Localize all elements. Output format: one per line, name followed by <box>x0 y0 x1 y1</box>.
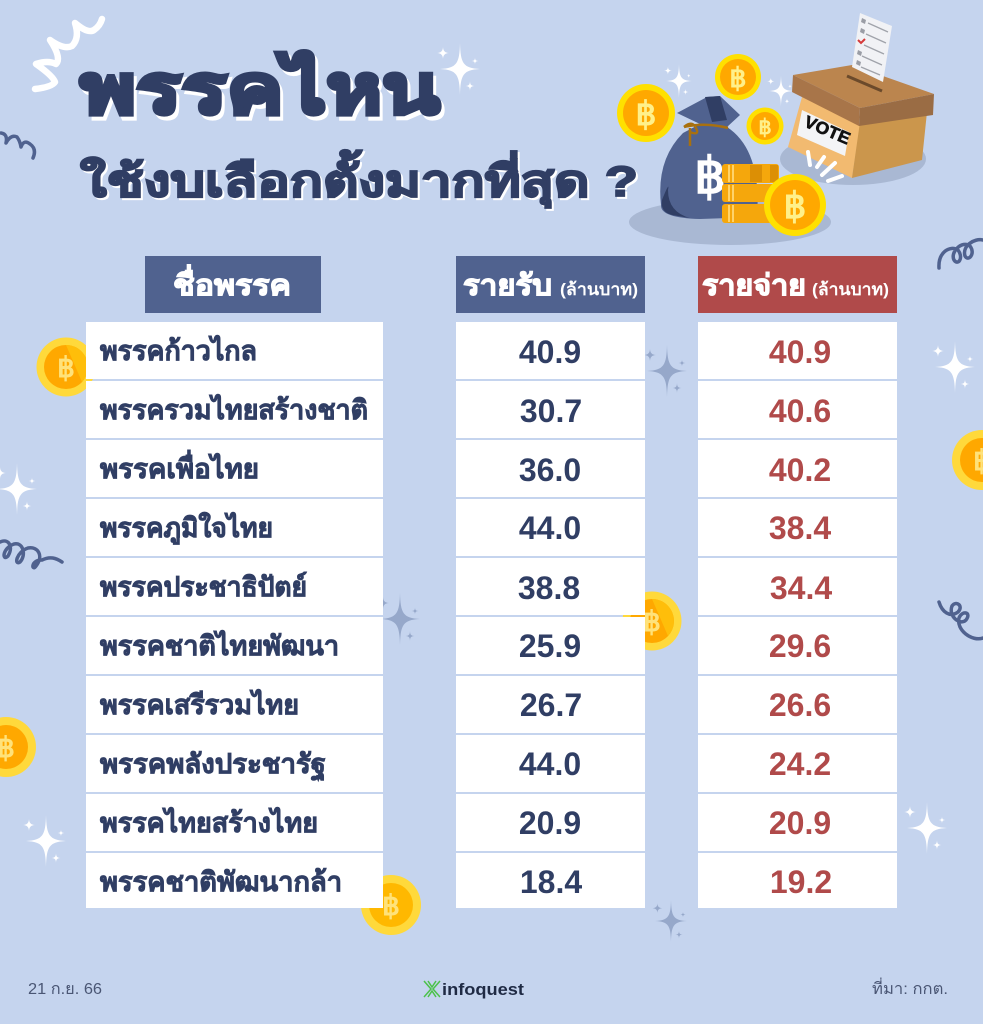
table: party names: พรรครวมไทยสร้างชาติ <box>100 394 368 425</box>
coin stack <box>722 164 779 223</box>
money bag <box>629 96 831 245</box>
footer: infoquest logo: infoquest <box>442 980 524 999</box>
table: income values: 40.9 <box>519 334 581 370</box>
squiggle: right lower <box>939 602 983 639</box>
title line 2: ใช้งบเลือกตั้งมากที่สุด ? <box>82 151 640 211</box>
coin: small: ฿ <box>758 116 772 139</box>
table: income values: 36.0 <box>519 452 581 488</box>
table: party names: พรรคก้าวไกล <box>100 335 257 366</box>
table: expense values: 40.6 <box>769 393 831 429</box>
sparkle: bottom <box>653 900 687 942</box>
squiggle: top left <box>35 19 102 89</box>
table: party names: พรรคพลังประชารัฐ <box>100 749 326 782</box>
coin: table bottom: ฿ <box>382 890 400 921</box>
coin: left: ฿ <box>636 95 656 132</box>
title line 1: พรรคไหน <box>83 54 443 132</box>
table: income values: 30.7 <box>520 393 582 429</box>
table: party names: พรรคไทยสร้างไทย <box>100 807 318 838</box>
table: expense values <box>698 322 897 908</box>
header: expense <box>698 256 897 313</box>
coin: right edge <box>952 430 983 490</box>
table: expense values: 34.4 <box>770 570 832 606</box>
coin: centre <box>622 592 682 650</box>
sparkle: between table and income <box>377 593 420 645</box>
table: expense values: 29.6 <box>769 628 831 664</box>
table: party names: พรรคประชาธิปัตย์ <box>100 571 307 602</box>
table: party names <box>86 322 383 908</box>
squiggle: right upper <box>939 240 983 268</box>
sparkle: right upper <box>932 341 975 393</box>
ballot box <box>780 13 934 185</box>
ballot box: VOTE <box>801 112 853 148</box>
sparkle: by coins <box>664 64 692 98</box>
table: income values: 38.8 <box>518 570 580 606</box>
title line 2 <box>80 149 640 211</box>
table: income values: 44.0 <box>519 510 581 546</box>
table: party names: พรรคเสรีรวมไทย <box>100 689 299 720</box>
header: expense: (ล้านบาท) <box>812 280 889 299</box>
header: party name: ชื่อพรรค <box>173 264 291 302</box>
sparkle: right lower <box>904 802 947 854</box>
coin: left of table: ฿ <box>57 352 75 383</box>
sparkle: left lower <box>23 815 66 867</box>
table: income values <box>456 322 645 908</box>
table: income values: 20.9 <box>519 805 581 841</box>
title line 1: พรรคไหน <box>80 50 440 128</box>
illustration: money bag, coins and ballot box <box>617 13 934 245</box>
coin: small <box>746 108 784 144</box>
footer: source: ที่มา: กกต. <box>872 977 948 998</box>
sparkle: by box <box>767 75 793 107</box>
header: party name <box>145 256 321 313</box>
table: expense values: 26.6 <box>769 687 831 723</box>
table: expense values: 24.2 <box>769 746 831 782</box>
table: expense values: 40.9 <box>769 334 831 370</box>
table: expense values: 40.2 <box>769 452 831 488</box>
table: income values: 26.7 <box>520 687 582 723</box>
table: income values: 25.9 <box>519 628 581 664</box>
table: expense values: 38.4 <box>769 510 831 546</box>
coin: left <box>617 84 675 142</box>
sparkle: title <box>437 43 480 95</box>
table: income values: 18.4 <box>520 864 582 900</box>
footer: date: 21 ก.ย. 66 <box>28 981 102 998</box>
table: party names: พรรคชาติพัฒนากล้า <box>100 867 342 897</box>
sparkle: between columns top <box>644 345 687 397</box>
table: party names: พรรคชาติไทยพัฒนา <box>100 630 339 661</box>
coin: left of table <box>36 338 96 396</box>
header: income: รายรับ <box>463 270 552 302</box>
table: party names: พรรคภูมิใจไทย <box>100 512 273 545</box>
coin: front: ฿ <box>784 185 806 226</box>
coin: table bottom <box>361 875 421 935</box>
table: expense values: 20.9 <box>769 805 831 841</box>
squiggle: left middle <box>0 541 62 568</box>
coin: top: ฿ <box>729 63 747 93</box>
coin: top <box>715 54 761 100</box>
sparkle: left middle <box>0 463 37 515</box>
money bag: ฿ <box>694 148 726 204</box>
coin: centre: ฿ <box>643 606 661 637</box>
table: party names: พรรคเพื่อไทย <box>100 449 259 484</box>
header: expense: รายจ่าย <box>702 270 806 302</box>
coin: left edge <box>0 717 36 777</box>
header: income <box>456 256 645 313</box>
title line 2: ใช้งบเลือกตั้งมากที่สุด ? <box>80 149 638 209</box>
table: expense values: 19.2 <box>770 864 832 900</box>
coin: front <box>764 174 826 236</box>
table: income values: 44.0 <box>519 746 581 782</box>
squiggle: left upper <box>1 133 34 158</box>
header: income: (ล้านบาท) <box>560 280 638 299</box>
